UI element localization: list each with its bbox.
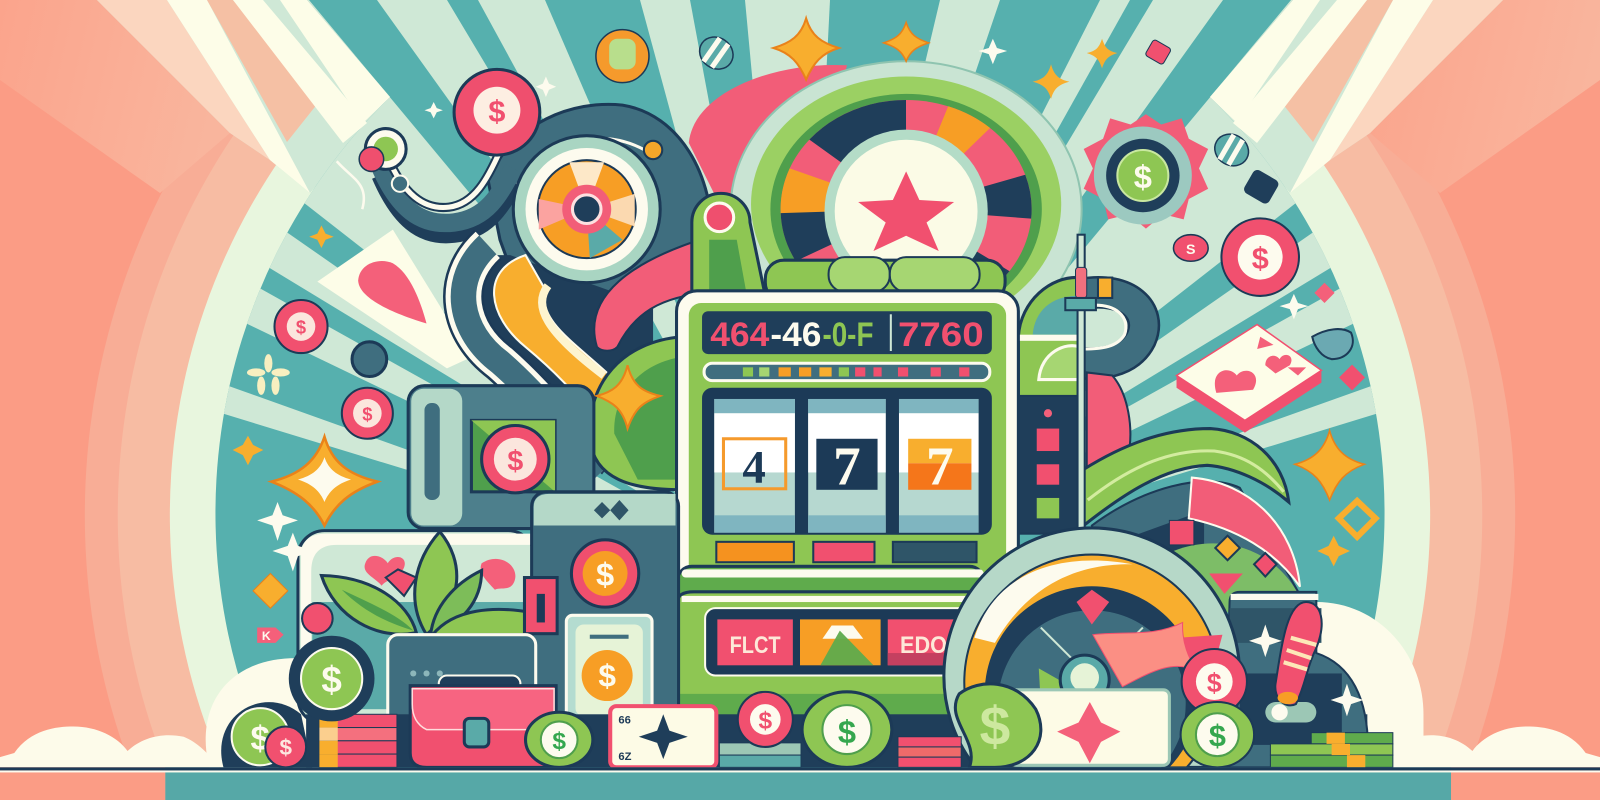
clasp	[524, 578, 557, 634]
green chip far left with red chip: $	[279, 735, 292, 760]
red brick stack left	[319, 714, 397, 767]
green chip by briefcase: $	[552, 728, 566, 755]
small icons: right gem and tiles	[1312, 283, 1365, 391]
sparkle: gold right	[1033, 64, 1069, 99]
sparkle: gold right large	[1295, 431, 1364, 500]
gauge	[944, 528, 1240, 767]
red stack center	[898, 737, 961, 767]
chip: red left lower: $	[362, 403, 372, 424]
chip: large red top left	[454, 69, 540, 155]
playing card: right hearts	[1177, 324, 1321, 433]
machine: reel window	[702, 388, 992, 535]
device: upper left slot with chip	[408, 386, 594, 529]
playing card bottom: 6Z	[618, 751, 632, 763]
machine: display: 7760	[898, 316, 984, 354]
chip: small red right: S	[1186, 242, 1196, 258]
machine: reel 1: 4	[742, 442, 766, 494]
card	[566, 615, 652, 726]
ball: dark	[352, 342, 387, 377]
playing card bottom	[610, 706, 716, 767]
tile: dark	[1242, 168, 1280, 205]
machine: reel 2: 7	[833, 436, 861, 497]
lower S curve with orange stripe	[453, 245, 653, 474]
red chip on right gauge: $	[1207, 668, 1222, 698]
icon: flower	[247, 354, 290, 395]
sunburst chip top right	[1084, 114, 1208, 229]
chip: red left lower	[342, 388, 393, 439]
chip: red left	[274, 300, 328, 353]
sparkle: gold top	[773, 18, 839, 80]
icon: gold sparkle	[597, 365, 660, 429]
sparkles: white left	[257, 77, 556, 571]
green lever	[692, 193, 765, 296]
big green dollar coin	[955, 684, 1041, 767]
grey chip stack	[719, 743, 801, 767]
green chip lower right: $	[1209, 719, 1226, 753]
device: dark tablet	[388, 635, 536, 740]
chip: red right large: $	[1252, 241, 1269, 275]
machine: lower cabinet	[678, 592, 1020, 735]
pill: striped right	[1209, 128, 1254, 172]
red chip center: $	[759, 708, 773, 735]
sparkle: gold upper left	[309, 226, 334, 248]
machine: control panel	[705, 608, 981, 676]
chip: orange top coin	[596, 30, 649, 83]
small red ball	[302, 603, 333, 634]
leaves	[321, 576, 416, 634]
green blob left of machine	[590, 337, 682, 490]
device: upper left slot with chip: $	[507, 445, 523, 477]
machine: display: 464	[710, 316, 770, 354]
floor: lower band	[0, 767, 1600, 800]
green swoosh right	[1084, 429, 1306, 612]
machine: display	[702, 311, 992, 354]
sparkle: white right	[1280, 294, 1308, 319]
machine side column	[1016, 396, 1082, 534]
green chip left in dark ring	[289, 636, 374, 721]
big green chip center: $	[838, 713, 856, 750]
sunburst chip top right: $	[1134, 158, 1152, 195]
chip: large red top left: $	[488, 94, 505, 128]
chip: small red right	[1173, 235, 1208, 261]
dark console right	[1224, 592, 1368, 767]
clouds: bottom right	[1316, 602, 1600, 767]
machine: small buttons	[716, 542, 977, 562]
floor line	[0, 767, 1600, 770]
roulette wheel	[731, 61, 1082, 357]
device: frame with leaves	[298, 531, 535, 724]
right green arm and hook	[1018, 277, 1144, 403]
pink curve beside lever	[594, 237, 719, 351]
big dark curve	[488, 104, 712, 306]
device: tall panel with chip and coin: $	[596, 556, 614, 593]
sparkle: white top	[979, 39, 1007, 64]
sparkle: gold left small	[233, 436, 263, 465]
icon: gold hollow diamond	[1339, 501, 1376, 537]
red chip on right gauge	[1182, 649, 1247, 714]
playing card: left heart	[317, 230, 471, 368]
sparkle: gold right small	[1087, 39, 1117, 68]
machine: control panel: EDO	[900, 632, 947, 659]
white card with diamond	[1010, 690, 1169, 765]
machine: display: -0-F	[822, 316, 873, 354]
eye wheel	[513, 136, 660, 283]
tile: small red	[1145, 39, 1172, 65]
machine: reel 3: 7	[926, 436, 954, 497]
sock shape	[1275, 602, 1322, 705]
device: tall panel with chip and coin	[524, 492, 679, 726]
sparkle: gold right lower	[1317, 536, 1350, 566]
bottom dark base	[306, 714, 1367, 767]
green chip far left with red chip: $	[251, 720, 270, 758]
chip: red left: $	[296, 317, 306, 338]
pill: striped top	[693, 31, 739, 76]
machine: display: -46	[770, 316, 821, 354]
green tops above machine	[765, 257, 1005, 301]
big green dollar coin: $	[980, 695, 1010, 757]
playing card bottom: 66	[618, 714, 631, 726]
green chip lower right	[1181, 702, 1254, 767]
briefcase	[410, 676, 556, 767]
device: tall panel with chip and coin: $	[598, 658, 616, 694]
green chip left in dark ring: $	[321, 659, 342, 700]
sparkle: big gold left	[271, 437, 378, 526]
stack of green bills right	[1270, 733, 1393, 767]
machine: reel 3	[899, 399, 979, 533]
pink swoosh behind wheel	[689, 65, 847, 194]
slot machine	[677, 291, 1020, 735]
green chip by briefcase	[526, 712, 593, 767]
machine: ledge	[678, 566, 984, 603]
star	[858, 171, 954, 251]
white squiggle left	[337, 161, 364, 209]
machine: reel 2	[808, 399, 886, 533]
lever rod	[1065, 235, 1112, 531]
icon: green and red gems	[1169, 520, 1277, 594]
handle: curved tube with knob	[359, 129, 515, 235]
sparkle: gold left diamond	[253, 573, 288, 608]
machine: LED strip	[704, 363, 990, 381]
pink right shape	[1087, 372, 1130, 480]
chip: red right large	[1221, 218, 1299, 296]
icon: pink tag	[257, 628, 284, 643]
clouds: bottom left	[0, 658, 327, 767]
big green chip center	[802, 692, 892, 767]
sparkle: gold top small	[884, 22, 929, 61]
hearts	[365, 556, 405, 586]
ribbon on gauge	[1093, 622, 1222, 687]
machine: reel 1	[714, 399, 795, 533]
chip	[571, 540, 639, 607]
green chip far left with red chip	[221, 702, 312, 767]
machine: upper cabinet	[677, 291, 1018, 597]
icon: pink tag: K	[262, 629, 271, 643]
machine: control panel: FLCT	[730, 632, 781, 659]
red chip center	[738, 692, 793, 747]
